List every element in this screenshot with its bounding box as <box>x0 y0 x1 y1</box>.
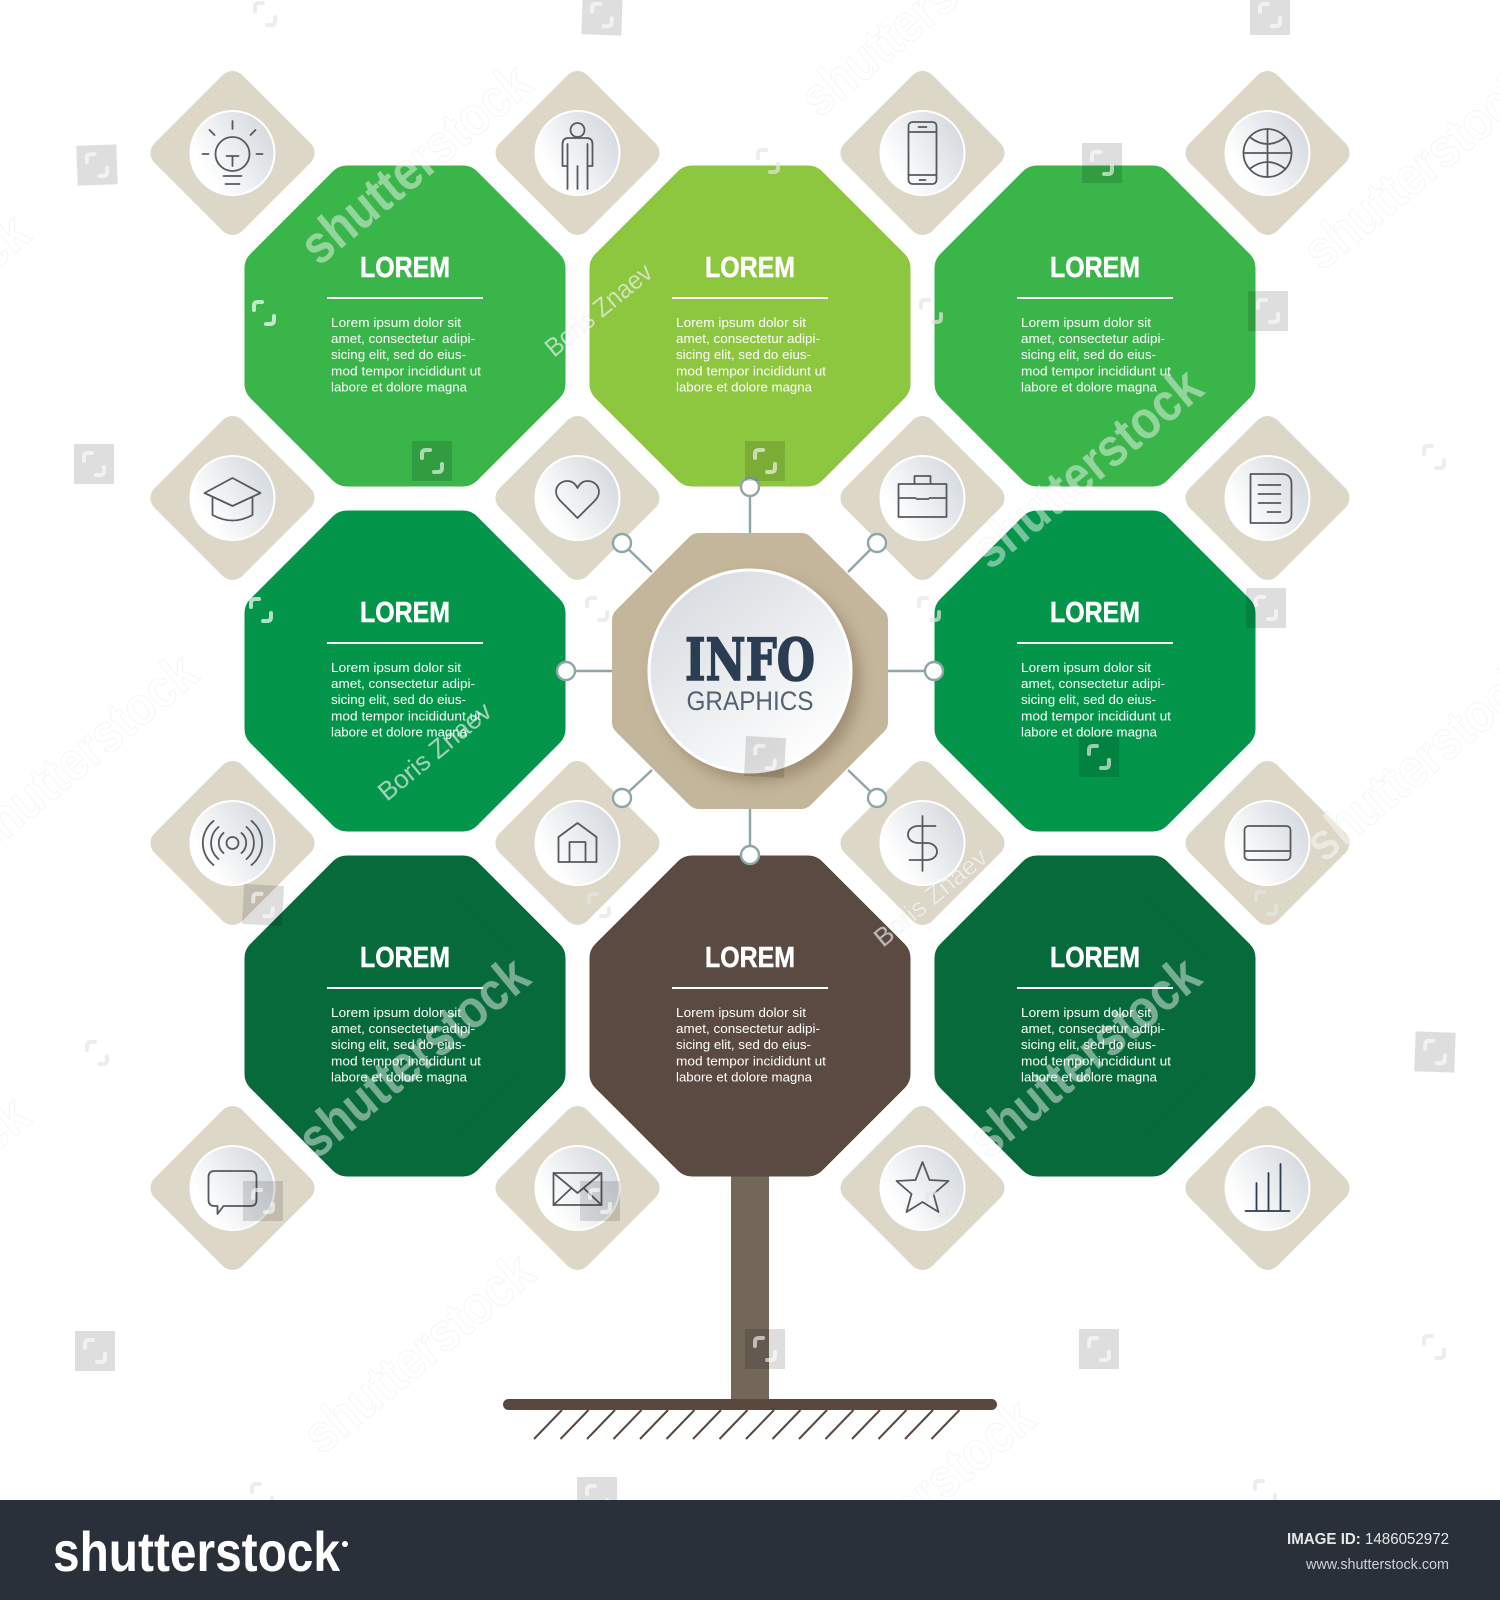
icon tile: heart <box>510 430 646 566</box>
panel: middle right: Lorem ipsum dolor sit <box>1021 660 1151 675</box>
icon tile: person <box>510 85 646 221</box>
watermarks: shutterstock <box>957 944 1212 1169</box>
central hub <box>626 547 874 795</box>
panel: bottom middle trunk crown: amet, consectetur adipi- <box>676 1021 820 1036</box>
panel: top left: sicing elit, sed do eius- <box>331 347 466 362</box>
panel: top right: sicing elit, sed do eius- <box>1021 347 1156 362</box>
central hub: GRAPHICS <box>686 686 814 716</box>
panel: bottom right <box>954 876 1236 1156</box>
central hub: INFO <box>685 626 815 694</box>
panel: middle left <box>264 530 546 812</box>
panel: top left: LOREM <box>360 252 450 284</box>
icon tile: graduation cap <box>164 430 300 566</box>
panel: bottom left: sicing elit, sed do eius- <box>331 1037 466 1052</box>
watermarks: Boris Znaev <box>868 842 993 953</box>
watermarks: shutterstock <box>288 51 543 276</box>
icon tile: signal <box>164 775 300 911</box>
panel: top right: labore et dolore magna <box>1021 380 1158 394</box>
panel: top middle <box>610 186 890 466</box>
footer bar <box>0 1500 1500 1600</box>
icon tile: briefcase <box>854 430 990 566</box>
icon tile: smartphone <box>854 85 990 221</box>
panel: bottom left: amet, consectetur adipi- <box>331 1021 475 1036</box>
panel: top left: labore et dolore magna <box>331 380 468 394</box>
panel: bottom right: labore et dolore magna <box>1021 1070 1158 1084</box>
panel: middle right: sicing elit, sed do eius- <box>1021 692 1156 707</box>
panel: bottom right: sicing elit, sed do eius- <box>1021 1037 1156 1052</box>
footer registered mark <box>342 1541 348 1547</box>
panel: middle right: mod tempor incididunt ut <box>1021 708 1171 724</box>
panel: bottom middle trunk crown: LOREM <box>705 942 795 974</box>
panel: bottom middle trunk crown: Lorem ipsum dolor sit <box>676 1005 806 1020</box>
panel: middle left: sicing elit, sed do eius- <box>331 692 466 707</box>
icon tile: star <box>854 1120 990 1256</box>
panel: top middle: LOREM <box>705 252 795 284</box>
panel: middle left: amet, consectetur adipi- <box>331 676 475 691</box>
panel: top middle: amet, consectetur adipi- <box>676 331 820 346</box>
panel: top left: amet, consectetur adipi- <box>331 331 475 346</box>
panel: bottom middle trunk crown: labore et dolore magna <box>676 1070 813 1084</box>
panel: bottom right: amet, consectetur adipi- <box>1021 1021 1165 1036</box>
panel: bottom right: mod tempor incididunt ut <box>1021 1054 1171 1068</box>
panel: top right: Lorem ipsum dolor sit <box>1021 315 1151 330</box>
panel: middle left: Lorem ipsum dolor sit <box>331 660 461 675</box>
panel: top left: mod tempor incididunt ut <box>331 364 481 378</box>
panel: bottom left: LOREM <box>360 942 450 974</box>
panel: top right: LOREM <box>1050 252 1140 284</box>
panel: middle right <box>954 530 1236 812</box>
panel: bottom middle trunk crown: sicing elit, sed do eius- <box>676 1037 811 1052</box>
watermarks: shutterstock <box>959 355 1214 580</box>
panel: top left <box>264 186 546 466</box>
panel: middle right: LOREM <box>1050 597 1140 629</box>
panel: bottom right: Lorem ipsum dolor sit <box>1021 1005 1151 1020</box>
panel: top right <box>954 186 1236 466</box>
icon tile: speech bubble <box>164 1120 300 1256</box>
footer url: www.shutterstock.com <box>1305 1556 1449 1573</box>
panel: top middle: mod tempor incididunt ut <box>676 364 826 378</box>
icon tile: house <box>510 775 646 911</box>
icon tile: basketball <box>1200 85 1336 221</box>
icon tile: document <box>1200 430 1336 566</box>
icon tile: bar chart <box>1200 1120 1336 1256</box>
panel: bottom left: mod tempor incididunt ut <box>331 1054 481 1068</box>
panel: top middle: sicing elit, sed do eius- <box>676 347 811 362</box>
watermarks: shutterstock <box>286 944 541 1169</box>
tree trunk <box>731 1170 769 1402</box>
panel: middle left: mod tempor incididunt ut <box>331 708 481 724</box>
panel: middle right: labore et dolore magna <box>1021 724 1158 740</box>
footer image id: IMAGE ID: 1486052972 <box>1287 1531 1449 1548</box>
footer logo: shutterstock <box>53 1520 341 1583</box>
panel: middle left: LOREM <box>360 597 450 629</box>
icon tile: tablet <box>1200 775 1336 911</box>
icon tile: dollar <box>854 775 990 911</box>
panel: bottom left: Lorem ipsum dolor sit <box>331 1005 461 1020</box>
panel: top middle: labore et dolore magna <box>676 380 813 394</box>
panel: top right: mod tempor incididunt ut <box>1021 364 1171 378</box>
panel: bottom left: labore et dolore magna <box>331 1070 468 1084</box>
icon tile: light bulb <box>164 85 300 221</box>
connectors from hub to panels <box>557 478 943 864</box>
watermarks: Boris Znaev <box>372 696 497 807</box>
panel: bottom right: LOREM <box>1050 942 1140 974</box>
icon tile: envelope <box>510 1120 646 1256</box>
panel: bottom middle trunk crown <box>610 876 890 1156</box>
panel: top right: amet, consectetur adipi- <box>1021 331 1165 346</box>
panel: top left: Lorem ipsum dolor sit <box>331 315 461 330</box>
panel: bottom middle trunk crown: mod tempor incididunt ut <box>676 1054 826 1068</box>
watermarks: Boris Znaev <box>539 257 658 363</box>
watermarks: shutterstock <box>291 1240 546 1465</box>
panel: middle right: amet, consectetur adipi- <box>1021 676 1165 691</box>
panel: middle left: labore et dolore magna <box>331 724 468 740</box>
panel: top middle: Lorem ipsum dolor sit <box>676 315 806 330</box>
panel: bottom left <box>264 876 546 1156</box>
ground line with hatching <box>503 1399 997 1439</box>
